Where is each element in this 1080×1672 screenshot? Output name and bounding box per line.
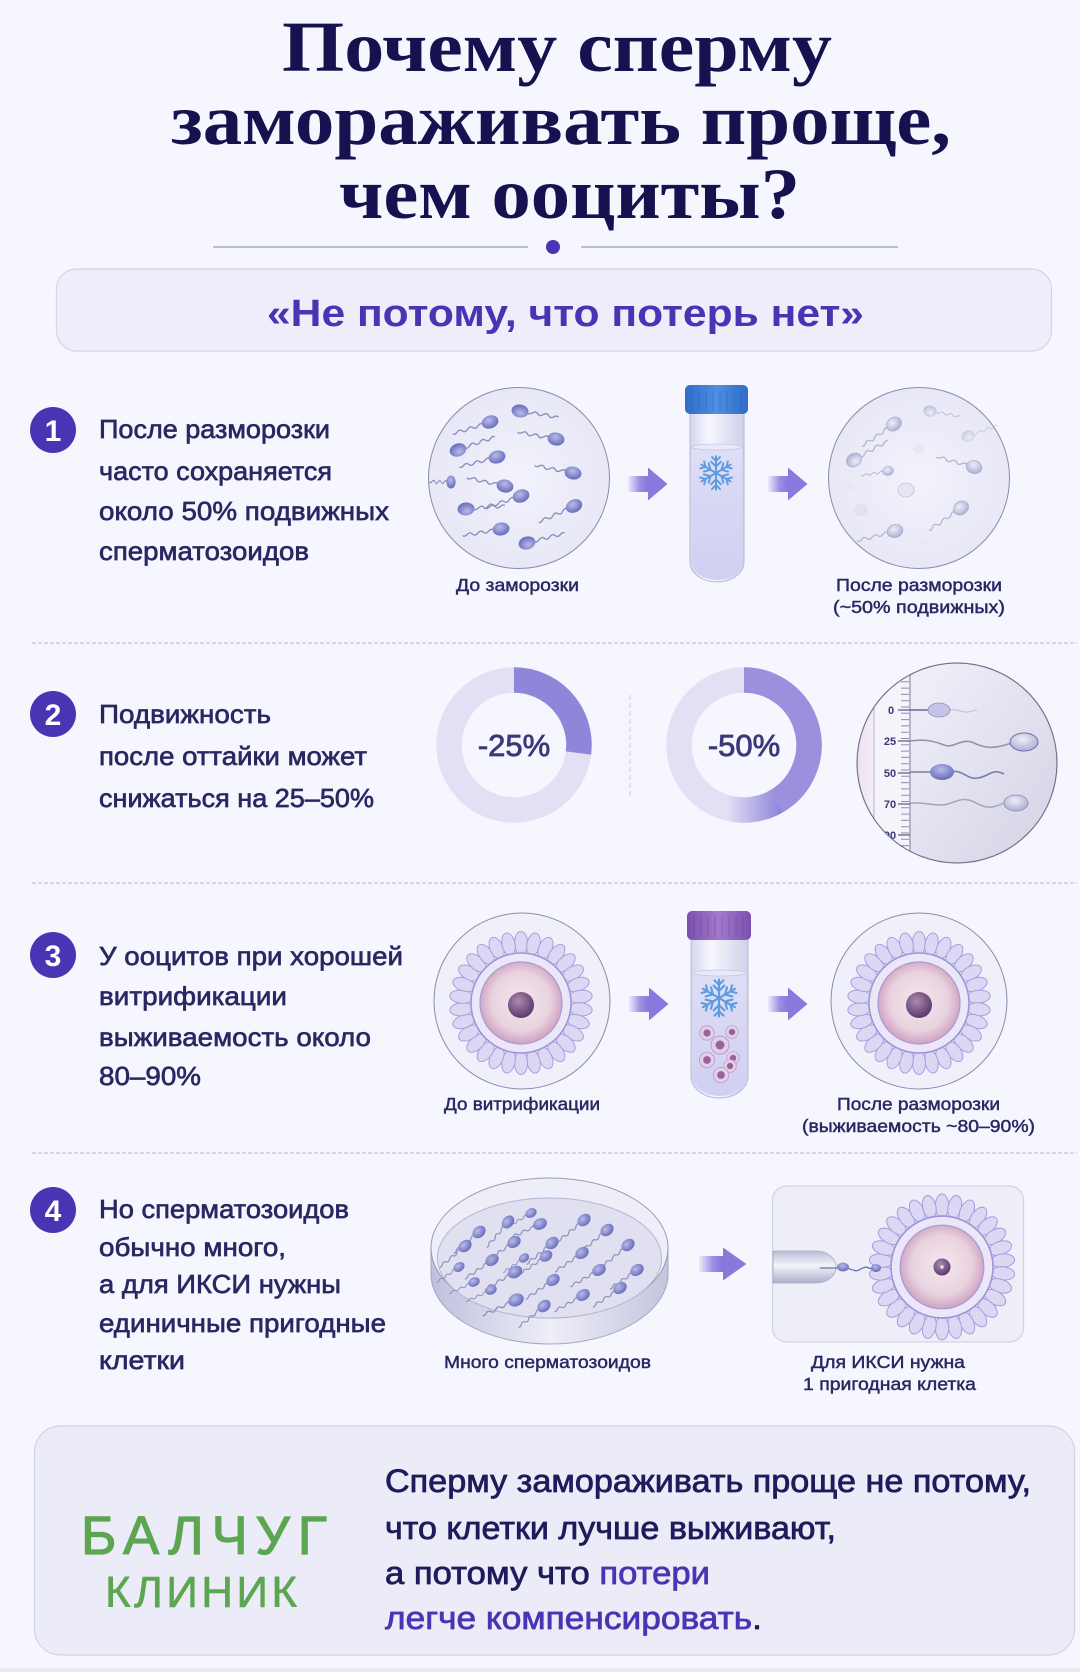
row 2 text: Подвижность (99, 699, 271, 729)
row 2 text (99, 699, 374, 813)
donut chart: -25% (449, 680, 579, 810)
oocyte after thawing (831, 913, 1007, 1089)
label: after thawing survival: (выживаемость ~80–90%) (802, 1116, 1035, 1136)
donut chart: -50%: -50% (708, 728, 780, 763)
arrow (768, 468, 808, 500)
row 1: sperm survival after thawing (30, 385, 1010, 617)
row 2: motility drop (30, 663, 1060, 863)
row 4 text: Но сперматозоидов (99, 1194, 349, 1224)
row 3 text: выживаемость около (99, 1022, 371, 1052)
title: Почему сперму (282, 7, 832, 87)
label: after thawing survival (802, 1094, 1035, 1136)
donut chart: -25%: -25% (478, 728, 550, 763)
row 1 text: часто сохраняется (99, 456, 332, 486)
conclusion text: что клетки лучше выживают, (385, 1510, 836, 1546)
title: чем ооциты? (339, 154, 800, 234)
petri dish with sperm (431, 1178, 668, 1344)
badge 2: 2 (45, 699, 61, 732)
conclusion text (385, 1463, 1031, 1636)
row 3 text: У ооцитов при хорошей (99, 941, 403, 971)
clinic logo: КЛИНИК (105, 1568, 297, 1617)
label: many sperm: Много сперматозоидов (444, 1352, 651, 1372)
row 3: oocyte vitrification (30, 911, 1035, 1136)
row 3 text: витрификации (99, 981, 287, 1011)
label: after thawing (833, 575, 1005, 617)
motility scale magnifier: 0 (888, 705, 894, 717)
title divider with dot (213, 240, 898, 254)
row 4 text: обычно много, (99, 1232, 286, 1262)
label: one cell for ICSI (803, 1352, 976, 1394)
circle: sperm after thawing (828, 388, 1010, 568)
badge 1 (30, 407, 76, 453)
badge 4: 4 (45, 1195, 62, 1228)
row 3 text (99, 941, 403, 1091)
motility scale magnifier: 90 (884, 830, 896, 842)
label: before vitrification: До витрификации (444, 1094, 600, 1114)
conclusion text: Сперму замораживать проще не потому, (385, 1463, 1031, 1499)
arrow (699, 1248, 746, 1280)
badge 4 (30, 1187, 76, 1233)
ICSI panel with pipette and oocyte (772, 1186, 1024, 1342)
badge 2 (30, 691, 76, 737)
row 4 text: а для ИКСИ нужны (99, 1269, 341, 1299)
label: after thawing: После разморозки (836, 575, 1002, 595)
test tube with snowflake (685, 385, 748, 582)
label: before freezing: До заморозки (456, 575, 579, 595)
arrow (768, 988, 808, 1020)
motility scale magnifier: 25 (884, 736, 896, 748)
badge 3: 3 (45, 940, 61, 973)
conclusion panel (34, 1426, 1074, 1655)
subtitle banner: «Не потому, что потерь нет» (267, 293, 864, 335)
arrow (628, 468, 668, 500)
badge 3 (30, 932, 76, 978)
motility scale magnifier: 50 (884, 768, 896, 780)
title (171, 7, 951, 234)
oocyte before vitrification (434, 913, 610, 1089)
title: замораживать проще, (171, 80, 951, 160)
label: one cell for ICSI: 1 пригодная клетка (803, 1374, 976, 1394)
conclusion text: легче компенсировать . (385, 1600, 762, 1636)
row 1 text (99, 414, 389, 566)
row 2 text: снижаться на 25–50% (99, 783, 374, 813)
row 4: many sperm, single cell for ICSI (30, 1178, 1024, 1394)
donut chart: -50% (679, 680, 809, 810)
clinic logo: БАЛЧУГ (81, 1506, 327, 1566)
row 1 text: После разморозки (99, 414, 330, 444)
conclusion text: а потому что потери (385, 1555, 710, 1591)
arrow (629, 988, 668, 1020)
row 2 text: после оттайки может (99, 741, 367, 771)
row 4 text: единичные пригодные (99, 1308, 386, 1338)
motility scale magnifier (856, 663, 1060, 863)
circle: sperm before freezing (428, 388, 610, 568)
row 1 text: сперматозоидов (99, 536, 309, 566)
test tube with snowflake and oocytes (687, 911, 751, 1098)
clinic logo (81, 1506, 327, 1617)
row 4 text: клетки (99, 1345, 185, 1375)
row 1 text: около 50% подвижных (99, 496, 389, 526)
label: one cell for ICSI: Для ИКСИ нужна (811, 1352, 965, 1372)
label: after thawing survival: После разморозки (837, 1094, 1000, 1114)
row 3 text: 80–90% (99, 1061, 201, 1091)
label: after thawing: (~50% подвижных) (833, 597, 1005, 617)
motility scale magnifier: 70 (884, 799, 896, 811)
subtitle banner (56, 269, 1052, 351)
row 4 text (99, 1194, 386, 1375)
badge 1: 1 (45, 415, 61, 448)
